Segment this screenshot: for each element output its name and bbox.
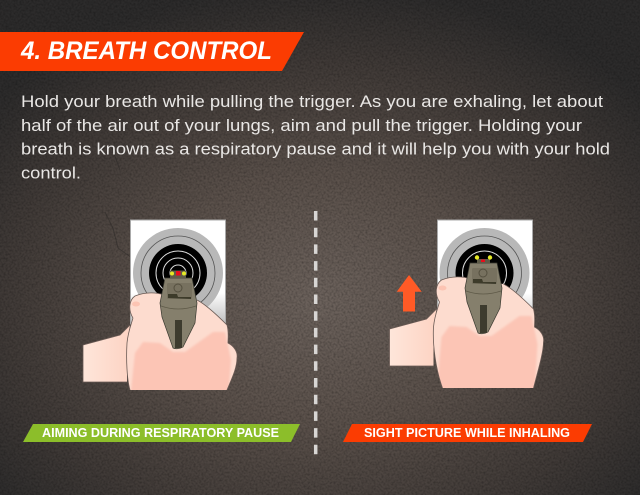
divider <box>314 211 317 456</box>
target sheet <box>438 220 532 324</box>
caption: aiming during respiratory pause: AIMING DURING RESPIRATORY PAUSE <box>42 426 279 440</box>
pistol rear view <box>160 270 197 349</box>
title: 4. BREATH CONTROL <box>20 37 272 65</box>
hand <box>390 277 544 394</box>
icon: up arrow <box>397 275 422 312</box>
body text: control. <box>21 164 81 182</box>
hand <box>83 293 237 400</box>
title banner <box>0 32 304 71</box>
body text: breath is known as a respiratory pause and it will help you with your hold <box>21 140 610 158</box>
caption: aiming during respiratory pause <box>23 424 300 442</box>
pistol rear view <box>465 255 502 334</box>
caption: sight picture while inhaling: SIGHT PICTURE WHILE INHALING <box>364 426 570 440</box>
body text: half of the air out of your lungs, aim and pull the trigger. Holding your <box>21 117 583 135</box>
sights: green-red-green <box>170 270 186 278</box>
body text <box>21 93 610 182</box>
caption: sight picture while inhaling <box>343 424 592 442</box>
sights: green-red-green <box>475 255 492 263</box>
illustration: aiming during respiratory pause <box>83 220 237 400</box>
target sheet <box>130 220 226 324</box>
body text: Hold your breath while pulling the trigger. As you are exhaling, let about <box>21 93 603 111</box>
illustration: sight picture while inhaling <box>390 220 544 394</box>
